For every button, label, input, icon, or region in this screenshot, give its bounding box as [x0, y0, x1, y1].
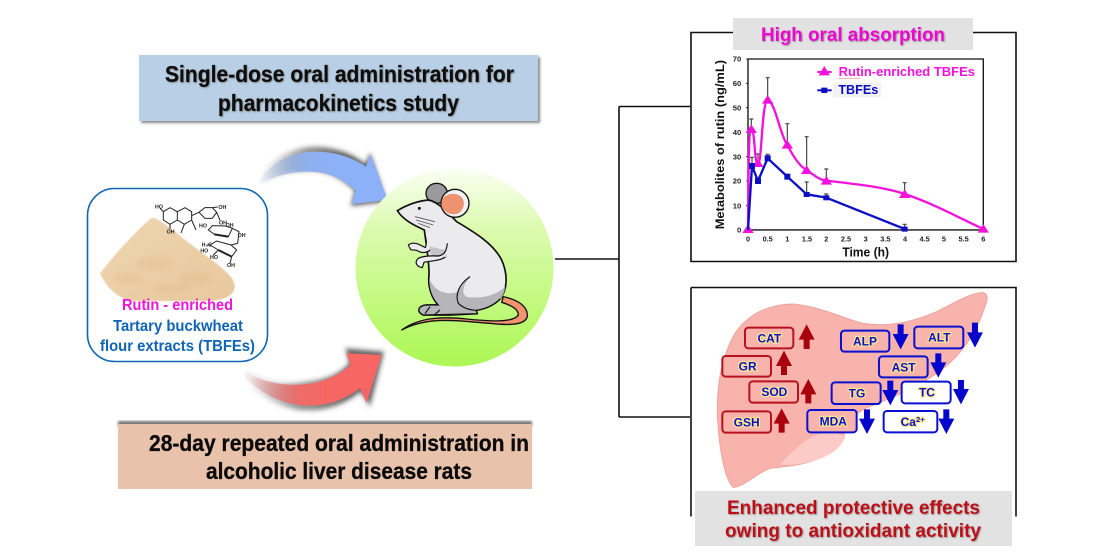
icon: rutin molecule: HO	[155, 204, 163, 210]
text: sample label: Tartary buckwheat	[113, 318, 243, 335]
text: sample label	[100, 297, 255, 355]
series: rutin-enriched TBFEs	[742, 95, 989, 233]
legend: Rutin-enriched TBFEs	[839, 65, 975, 79]
heading: single-dose pharmacokinetics: pharmacokinetics study	[218, 90, 459, 116]
marker labels: GR	[739, 360, 757, 374]
icon: rutin molecule: OH	[219, 220, 227, 226]
icon: rutin molecule: H₃C	[202, 243, 212, 249]
x ticks: 4	[903, 234, 908, 243]
axis title: x: Time (h)	[842, 246, 889, 260]
marker labels: AST	[892, 360, 916, 374]
panel: TBFE sample	[88, 188, 268, 362]
heading: enhanced protective effects: Enhanced protective effects	[727, 497, 980, 519]
marker labels: Ca	[901, 415, 916, 429]
text: sample label: flour extracts (TBFEs)	[100, 338, 255, 355]
heading: single-dose pharmacokinetics	[139, 55, 540, 123]
y ticks: 30	[733, 152, 741, 161]
icon: rutin molecule: HO	[210, 255, 218, 261]
marker labels: MDA	[820, 414, 847, 428]
x ticks: 0.5	[763, 234, 773, 243]
forelegs	[408, 232, 430, 253]
y ticks: 20	[733, 177, 741, 186]
legend	[817, 65, 975, 97]
rear ear	[426, 183, 447, 203]
panel: pharmacokinetics chart	[691, 18, 1016, 262]
ear	[441, 189, 469, 217]
connector lines	[555, 106, 690, 417]
marker labels: GSH	[734, 416, 760, 430]
icon: flour powder heap	[100, 218, 235, 301]
marker labels	[734, 331, 951, 430]
body shading	[419, 277, 505, 315]
y ticks: 70	[733, 55, 741, 64]
heading: 28-day repeated administration	[118, 421, 532, 489]
icon: rutin molecule: OH	[227, 263, 235, 269]
icon: rutin molecule: OH	[218, 205, 226, 211]
icon: rutin molecule: OH	[167, 229, 175, 235]
x ticks: 5.5	[959, 234, 969, 243]
down arrows	[859, 323, 983, 434]
x ticks: 1	[785, 234, 789, 243]
heading: high oral absorption	[733, 18, 973, 50]
tail	[402, 297, 527, 330]
x ticks	[746, 234, 985, 243]
y ticks: 40	[733, 128, 741, 137]
x ticks: 3	[864, 234, 868, 243]
x ticks: 0	[746, 234, 750, 243]
x ticks: 2.5	[841, 234, 851, 243]
icon: rutin molecule: HO	[199, 224, 207, 230]
arrow: red curved arrow to rat	[243, 348, 384, 410]
icon: rutin molecule	[155, 204, 246, 269]
liver illustration	[717, 293, 987, 487]
x ticks: 4.5	[920, 234, 930, 243]
y ticks: 60	[733, 79, 741, 88]
series: TBFEs	[748, 155, 908, 232]
error bars	[748, 78, 907, 230]
heading: single-dose pharmacokinetics: Single-dose oral administration for	[165, 61, 514, 87]
axis title: y: Metabolites of rutin (ng/mL)	[713, 60, 727, 229]
x ticks: 3.5	[880, 234, 890, 243]
marker labels: TC	[919, 386, 935, 400]
text: sample label: Rutin - enriched	[122, 297, 233, 314]
marker labels: 2+	[916, 415, 925, 424]
line chart	[713, 55, 989, 260]
marker labels: TG	[849, 386, 865, 400]
x ticks: 6	[981, 234, 985, 243]
icon: green circle with rat	[356, 168, 554, 366]
icon: rutin molecule: HO	[200, 248, 208, 254]
x ticks: 1.5	[802, 234, 812, 243]
heading: enhanced protective effects: owing to antioxidant activity	[725, 520, 981, 542]
body	[397, 200, 506, 315]
blue markers	[807, 327, 963, 432]
heading: 28-day repeated administration: 28-day repeated oral administration in	[149, 430, 529, 456]
marker labels: ALP	[853, 335, 877, 349]
red markers	[722, 328, 798, 433]
icon: rutin molecule: OH	[238, 233, 246, 239]
legend: TBFEs	[838, 83, 878, 97]
heading: 28-day repeated administration: alcoholic liver disease rats	[206, 458, 472, 484]
heading: high oral absorption: High oral absorption	[761, 24, 945, 46]
icon: rutin molecule: OH	[226, 223, 234, 229]
arrow: blue curved arrow to rat	[257, 147, 388, 206]
y ticks: 0	[737, 226, 741, 235]
x ticks: 2	[824, 234, 828, 243]
heading: enhanced protective effects	[695, 491, 1012, 546]
marker labels: SOD	[761, 385, 788, 399]
up arrows	[774, 324, 816, 433]
marker labels: CAT	[757, 332, 782, 346]
marker labels: ALT	[928, 331, 951, 345]
y ticks	[733, 55, 741, 235]
eye and whiskers	[418, 207, 421, 210]
y ticks: 10	[733, 201, 741, 210]
x ticks: 5	[942, 234, 946, 243]
panel: liver effects	[691, 288, 1016, 546]
y ticks: 50	[733, 103, 741, 112]
